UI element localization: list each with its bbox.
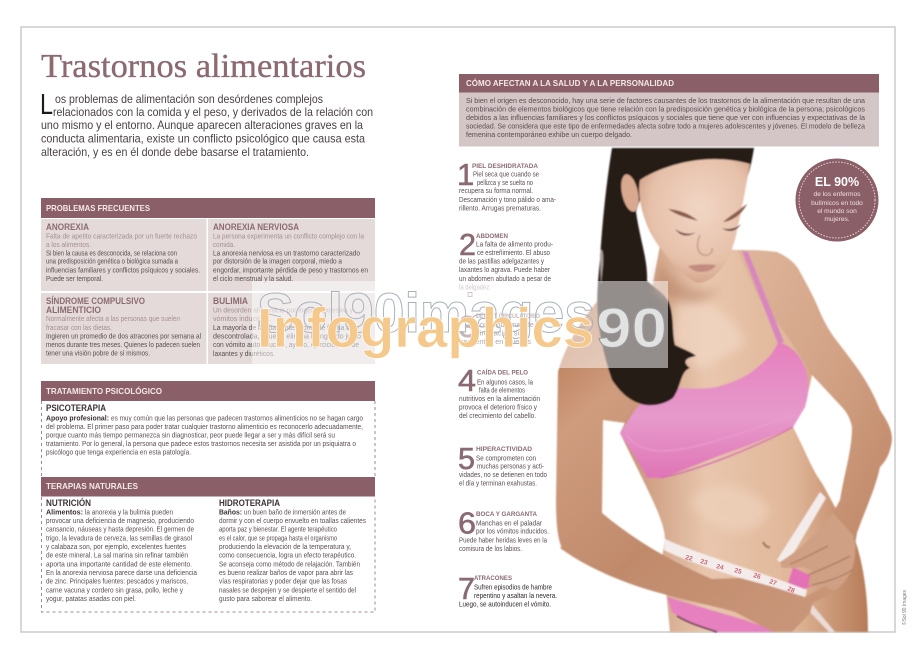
column: nutricion — [46, 497, 197, 603]
item 5: hiperactividad: HIPERACTIVIDAD — [476, 446, 532, 453]
item 1: piel deshidratada: recupera su forma normal. — [459, 186, 533, 195]
column: hidroterapia: es el calor, que se propaga hasta el organismo — [219, 536, 337, 542]
item 5: hiperactividad: muchas personas y acti- — [477, 462, 545, 470]
column: nutricion: de este mineral. La sal marina sin refinar también — [46, 552, 188, 560]
card: anorexia nerviosa: La persona experimenta un conflicto complejo con la — [213, 234, 364, 240]
column: hidroterapia: dormir y con el cuerpo envuelto en toallas calientes — [219, 518, 366, 525]
measuring tape numbers: 26 — [752, 572, 762, 581]
item 2: abdomen: de las pastillas adelgazantes y — [459, 256, 544, 266]
item 3: text under watermark — [459, 309, 540, 346]
item 7: atracones: repentino y asaltan la nevera. — [474, 591, 557, 600]
item 5: hiperactividad — [458, 441, 547, 488]
column: hidroterapia: un buen baño de inmersión antes de — [244, 510, 346, 516]
intro paragraph: uno mismo y el entorno. Aunque aparecen alteraciones graves en la — [41, 119, 364, 132]
card: anorexia nerviosa: ANOREXIA NERVIOSA — [213, 222, 299, 232]
card: anorexia — [41, 219, 206, 291]
panel: problemas frecuentes — [41, 198, 375, 364]
measuring tape numbers: 28 — [786, 585, 796, 595]
panel: como afectan a la salud: femenina contemporáneo exhibe un cuerpo delgado. — [466, 130, 632, 139]
column: hidroterapia: Baños: — [219, 510, 242, 516]
item 3: text under watermark: 3 — [459, 309, 476, 344]
item 1: piel deshidratada: 1 — [457, 157, 474, 192]
column: hidroterapia: vías respiratorias y poder dejar que las fosas — [219, 578, 347, 586]
item 2: abdomen: laxantes lo agrava. Puede haber — [459, 265, 551, 274]
item 7: atracones: ATRACONES — [474, 575, 512, 582]
item 2: abdomen: un abdomen abultado a pesar de — [459, 274, 551, 283]
badge: el 90% — [796, 158, 878, 242]
card: bulimia: descontrolada, y luego elimina lo ingerido junto — [213, 334, 361, 340]
card: anorexia nerviosa: engordar, importante pérdida de peso y trastornos en — [213, 268, 368, 274]
card: bulimia: laxantes y diuréticos. — [213, 351, 275, 358]
column: hidroterapia: nasales se despejen y se despierte el sentido del — [219, 588, 356, 594]
item 1: piel deshidratada: rillento. Arrugas prematuras. — [459, 204, 541, 212]
item 4: caida del pelo: CAÍDA DEL PELO — [477, 368, 528, 376]
panel: tratamiento psicologico: TRATAMIENTO PSICOLÓGICO — [46, 385, 162, 396]
item 2: abdomen: la delgadez. — [459, 282, 491, 292]
panel: terapias naturales: TERAPIAS NATURALES — [46, 481, 138, 491]
intro paragraph: os problemas de alimentación son desórdenes complejos — [55, 93, 323, 106]
panel: terapias naturales — [41, 477, 375, 612]
card: anorexia: a los alimentos. — [46, 242, 91, 249]
photo credit: ©Sol 90 Images — [901, 590, 908, 625]
panel: tratamiento psicologico: Apoyo profesional: — [46, 416, 109, 422]
item 6: boca y garganta: Manchas en el paladar — [476, 518, 543, 528]
card: sindrome compulsivo alimenticio: fracasar con las dietas. — [46, 325, 112, 332]
panel: tratamiento psicologico: es muy común que las personas que padecen trastornos alimenticios no se hagan cargo — [111, 416, 363, 422]
item 1: piel deshidratada: pellizca y se suelta no — [477, 178, 533, 187]
panel: como afectan a la salud: CÓMO AFECTAN A LA SALUD Y A LA PERSONALIDAD — [466, 77, 674, 88]
card: anorexia: ANOREXIA — [46, 222, 89, 232]
panel: como afectan a la salud: sociedad. Se considera que este tipo de enfermedades afecta sobre todo a mujeres adolescentes y jóvenes. El modelo de belleza — [466, 122, 866, 130]
column: hidroterapia: HIDROTERAPIA — [219, 498, 280, 509]
card: anorexia nerviosa: La anorexia nerviosa es un trastorno caracterizado — [213, 250, 360, 258]
card: sindrome compulsivo alimenticio: Ingieren un promedio de dos atracones por semana al — [46, 334, 201, 340]
item 1: piel deshidratada: Piel seca que cuando se — [473, 170, 539, 178]
item 3: text under watermark: frecuentes en quienes — [459, 337, 531, 346]
card: anorexia nerviosa — [208, 219, 375, 291]
badge: el 90%: el mundo son — [817, 208, 857, 215]
measuring tape numbers: 27 — [768, 578, 778, 587]
item 4: caida del pelo: nutritivos en la alimentación — [459, 394, 540, 403]
item 3: text under watermark: circulación son — [476, 328, 526, 338]
column: hidroterapia: aporta paz y bienestar. El agente terapéutico — [219, 526, 337, 534]
column: nutricion: aporta una importante cantidad de este elemento. — [46, 562, 192, 568]
column: hidroterapia: como consecuencia, logra un efecto terapéutico. — [219, 552, 356, 560]
card: sindrome compulsivo alimenticio: SÍNDROME COMPULSIVO — [46, 296, 145, 306]
badge: el 90%: bulímicos en todo — [811, 200, 863, 207]
item 1: piel deshidratada: Descamación y tono pálido o ama- — [459, 195, 557, 204]
card: sindrome compulsivo alimenticio: ALIMENTICIO — [46, 305, 101, 315]
item 2: abdomen: 2 — [459, 227, 476, 262]
item 6: boca y garganta — [458, 506, 549, 553]
item 5: hiperactividad: el día y terminan exahustas. — [459, 478, 537, 488]
card: sindrome compulsivo alimenticio: tener una visión pobre de sí mismos. — [46, 350, 150, 358]
item 4: caida del pelo: En algunos casos, la — [477, 378, 533, 386]
column: nutricion: NUTRICIÓN — [46, 497, 91, 509]
intro paragraph: alteración, y es en él donde debe basarse el tratamiento. — [41, 146, 309, 159]
card: bulimia: vómitos inducidos. — [213, 316, 271, 323]
column: hidroterapia: gusto para saborear el alimento. — [219, 596, 312, 603]
item 3: text under watermark: DÉFICIT CIRCULATORIO — [476, 311, 540, 320]
column: hidroterapia: es bueno realizar baños de vapor para abrir las — [219, 570, 353, 577]
column: nutricion: carne vacuna y cordero sin grasa, pollo, leche y — [46, 588, 183, 594]
watermark — [252, 281, 668, 368]
card: anorexia: influencias familiares y conflictos psíquicos y sociales. — [46, 268, 200, 274]
item 7: atracones: Luego, se autoinducen el vómito. — [459, 600, 551, 608]
card: anorexia nerviosa: comida. — [213, 242, 235, 249]
column: hidroterapia — [219, 498, 366, 603]
panel: como afectan a la salud — [459, 74, 879, 146]
item 7: atracones — [458, 571, 557, 608]
panel: tratamiento psicologico: psicólogo que tenga experiencia en esta patología. — [46, 450, 191, 456]
panel: como afectan a la salud: debidos a las influencias familiares y los conflictos psíquicos y sociales que tiene que ver con influencias y expectativas de la — [466, 113, 866, 122]
item 6: boca y garganta: por los vómitos inducidos. — [476, 526, 549, 536]
measuring tape numbers: 24 — [715, 563, 725, 572]
card: anorexia: Puede ser temporal. — [46, 276, 103, 283]
item 5: hiperactividad: vidades, no se detienen en todo — [459, 470, 547, 479]
card: bulimia: con vómito autoinducido, ayuno, ejercicio, uso de — [213, 342, 359, 349]
watermark: Infographics — [257, 296, 594, 359]
panel: tratamiento psicologico: del problema. El primer paso para poder tratar cualquier trastorno alimenticio es reconocerlo adecuadamente, — [46, 424, 363, 431]
card: sindrome compulsivo alimenticio — [41, 293, 206, 364]
badge: el 90%: de los enfermos — [814, 191, 861, 198]
item 5: hiperactividad: Se comprometen con — [476, 454, 536, 462]
column: hidroterapia: produciendo la elevación de la temperatura y, — [219, 544, 351, 551]
panel: como afectan a la salud: combinación de elementos biológicos que tiene relación con la predisposición genética y biológica de la persona; psicológicos — [466, 104, 865, 114]
item 2: abdomen — [459, 227, 554, 296]
card: anorexia: una predisposición genética o biológica sumada a — [46, 258, 178, 266]
measuring tape numbers: 22 — [684, 554, 694, 563]
column: nutricion: Alimentos: — [46, 510, 83, 516]
item 6: boca y garganta: BOCA Y GARGANTA — [476, 511, 537, 518]
panel: como afectan a la salud: Si bien el origen es desconocido, hay una serie de factores causantes de los trastornos de la alimentación que resultan de una — [466, 96, 866, 105]
column: nutricion: provocar una deficiencia de magnesio, produciendo — [46, 518, 194, 525]
item 4: caida del pelo: provoca el deterioro físico y — [459, 402, 537, 412]
photo: woman measuring her waist — [556, 148, 892, 632]
badge: el 90%: mujeres. — [824, 216, 850, 223]
item 4: caida del pelo — [458, 363, 540, 420]
item 3: text under watermark: Los problemas de — [476, 320, 534, 329]
column: nutricion: y calabaza son, por ejemplo, excelentes fuentes — [46, 544, 186, 551]
card: anorexia nerviosa: el ciclo menstrual y la salud. — [213, 276, 293, 283]
item 2: abdomen: ce estreñimiento. El abuso — [477, 248, 550, 257]
panel: tratamiento psicologico: porque cuanto más tiempo permanezca sin diagnosticar, peor puede llegar a ser y más difícil será su — [46, 432, 335, 440]
column: nutricion: cansancio, náuseas y hasta depresión. El germen de — [46, 526, 194, 534]
column: nutricion: En la anorexia nerviosa parece darse una deficiencia — [46, 570, 197, 577]
panel header: PROBLEMAS FRECUENTES — [46, 203, 150, 213]
item 4: caida del pelo: del crecimiento del cabello. — [459, 411, 536, 420]
item 6: boca y garganta: Puede haber heridas leves en la — [459, 536, 547, 544]
item 7: atracones: Sufren episodios de hambre — [474, 582, 552, 592]
item 4: caida del pelo: 4 — [458, 363, 476, 398]
card: bulimia — [208, 293, 375, 364]
watermark: Sol90images — [257, 281, 595, 344]
column: nutricion: la anorexia y la bulimia pueden — [85, 510, 173, 516]
intro paragraph: conducta alimentaria, existe un conflicto psicológico que causa esta — [41, 132, 366, 146]
column: nutricion: trigo, la levadura de cerveza, las semillas de girasol — [46, 536, 192, 542]
watermark: 90 — [596, 296, 667, 359]
badge: el 90%: EL 90% — [815, 175, 859, 189]
item 2: abdomen: ABDOMEN — [476, 233, 508, 240]
panel: tratamiento psicologico: tratamiento. Por lo general, la persona que padece estos trastornos necesita ser asistida por un psiquiatra o — [46, 441, 356, 448]
card: bulimia: La mayoría de las pacientes come de forma muy — [213, 325, 359, 332]
drop cap: L — [40, 89, 53, 121]
item 4: caida del pelo: falta de elementos — [479, 386, 525, 394]
column: nutricion: yogur, patatas asadas con piel. — [46, 596, 136, 603]
card: sindrome compulsivo alimenticio: Normalmente afecta a las personas que suelen — [46, 316, 180, 323]
column: hidroterapia: Se aconseja como método de relajación. También — [219, 562, 360, 568]
item 1: piel deshidratada: PIEL DESHIDRATADA — [472, 163, 538, 170]
measuring tape numbers: 25 — [733, 567, 743, 576]
item 7: atracones: 7 — [458, 571, 475, 606]
item 6: boca y garganta: comisura de los labios. — [459, 544, 522, 553]
panel: tratamiento psicologico — [41, 381, 375, 476]
card: bulimia: BULIMIA — [213, 296, 248, 306]
card: anorexia: Si bien la causa es desconocida, se relaciona con — [46, 250, 177, 258]
intro paragraph: relacionados con la comida y el peso, y derivados de la relación con — [53, 106, 373, 119]
card: bulimia: Un desorden alimenticio por ingesta excesiva y — [213, 308, 353, 314]
item 5: hiperactividad: 5 — [458, 441, 475, 476]
title: Trastornos alimentarios — [41, 48, 366, 85]
card: anorexia: Falta de apetito caracterizada por un fuerte rechazo — [46, 234, 197, 240]
column: nutricion: de zinc. Principales fuentes: pescados y mariscos, — [46, 578, 188, 586]
panel header — [41, 198, 375, 218]
panel: tratamiento psicologico: PSICOTERAPIA — [46, 403, 106, 414]
item 2: abdomen: La falta de alimento produ- — [476, 240, 554, 248]
card: sindrome compulsivo alimenticio: menos durante tres meses. Quienes lo padecen suelen — [46, 342, 200, 349]
item 6: boca y garganta: 6 — [458, 506, 476, 540]
measuring tape numbers — [684, 554, 796, 595]
intro paragraph — [40, 89, 373, 159]
card: anorexia nerviosa: por distorsión de la imagen corporal, miedo a — [213, 258, 342, 266]
item 1: piel deshidratada — [457, 157, 557, 212]
measuring tape numbers: 23 — [699, 558, 709, 567]
